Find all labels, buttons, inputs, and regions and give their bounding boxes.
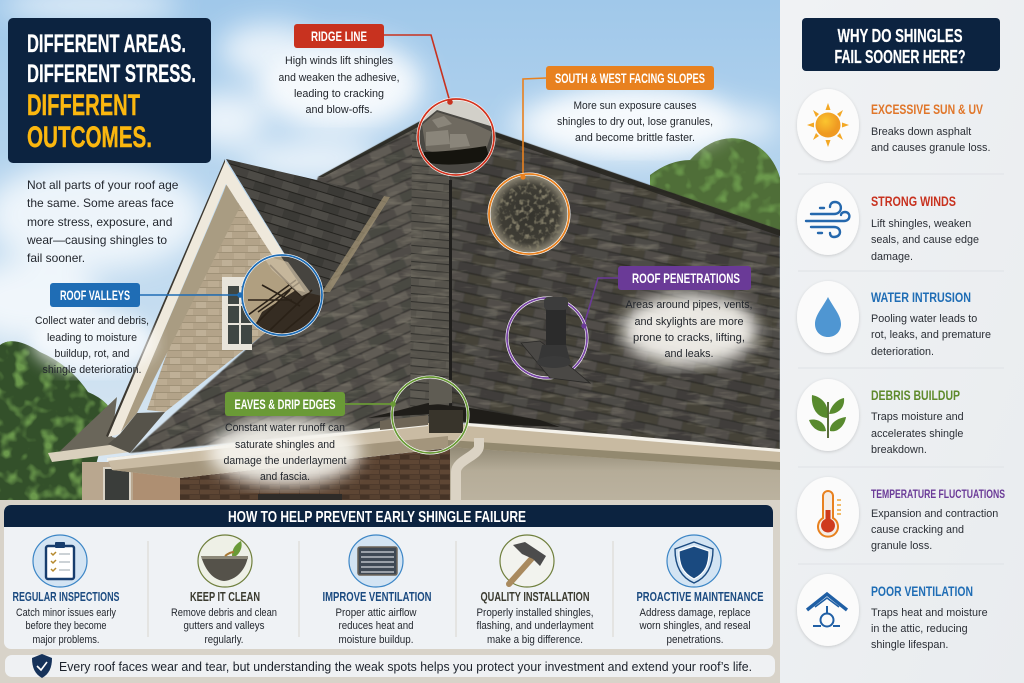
item: debris buildup: Traps moisture and [871,411,964,423]
intro text: fail sooner. [27,251,85,265]
callout: roof valleys: leading to moisture [47,332,137,344]
damaged eave corner [368,403,560,427]
item: water intrusion [797,281,991,358]
item: water intrusion: deterioration. [871,346,934,358]
callout: south and west facing slopes: More sun exposure causes [574,100,697,112]
title panel: DIFFERENT AREAS. [27,30,186,58]
callout: eaves and drip edges [209,377,468,486]
tip: keep it clean: KEEP IT CLEAN [190,589,260,604]
item: temperature fluctuations [797,477,1005,552]
lower valley wedge [108,412,165,453]
tip: proactive maintenance: worn shingles, and reseal [639,620,750,632]
left tree [0,341,114,505]
item: debris buildup: DEBRIS BUILDUP [871,388,960,403]
tip: keep it clean: Remove debris and clean [171,607,277,619]
tip: proactive maintenance: PROACTIVE MAINTENANCE [636,589,764,604]
tip: regular inspections: REGULAR INSPECTIONS [12,589,120,604]
tip: regular inspections: Catch minor issues early [16,607,117,619]
intro text: more stress, exposure, and [27,215,172,229]
icon: clipboard [33,535,87,587]
tip: improve ventilation: reduces heat and [338,620,414,632]
item: poor ventilation: Traps heat and moisture [871,607,988,619]
intro text: wear—causing shingles to [26,233,167,247]
item: water intrusion: Pooling water leads to [871,313,977,325]
tip: proactive maintenance: penetrations. [666,634,724,646]
item: debris buildup: accelerates shingle [871,428,963,440]
vent pipe [521,297,590,383]
weathering streaks [130,112,780,453]
hip band [410,112,449,430]
tip: quality installation: Properly installed shingles, [476,607,594,619]
callout: eaves and drip edges: and fascia. [260,471,310,483]
tip: quality installation: flashing, and underlayment [476,620,594,632]
item: debris buildup [797,379,964,456]
item: temperature fluctuations: Expansion and contraction [871,508,998,520]
callout: ridge line: High winds lift shingles [285,55,393,67]
title panel [8,18,211,163]
callout: ridge line: and blow-offs. [306,104,372,116]
item: poor ventilation: POOR VENTILATION [871,584,973,599]
brick wall [180,448,450,510]
item: strong winds [797,183,979,263]
item: water intrusion: rot, leaks, and premature [871,329,991,341]
callout: roof valleys: Collect water and debris, [35,315,149,327]
intro text: the same. Some areas face [27,196,174,210]
panel heading [802,18,1000,71]
tip: improve ventilation: IMPROVE VENTILATION [322,589,432,604]
item: poor ventilation: shingle lifespan. [871,639,948,651]
icon: vent grille [349,535,403,587]
tip: quality installation [476,535,594,646]
panel heading: FAIL SOONER HERE? [834,47,966,67]
tip: improve ventilation: moisture buildup. [338,634,414,646]
callout: eaves and drip edges: EAVES & DRIP EDGES [234,396,336,412]
dormer roof [226,159,390,290]
item: excessive sun: Breaks down asphalt [871,126,971,138]
icon: shield [667,535,721,587]
title panel: DIFFERENT [27,89,140,122]
icon: check shield [32,654,52,678]
icon: attic vent [807,594,847,626]
callout: south and west facing slopes: and become brittle faster. [575,132,695,144]
intro text: Not all parts of your roof age [27,178,179,192]
item: water intrusion: WATER INTRUSION [871,290,971,305]
right tree [650,138,780,235]
tip: proactive maintenance [636,535,764,646]
tip: quality installation: QUALITY INSTALLATION [480,589,590,604]
dormer window [222,277,252,350]
callout: roof valleys [31,255,322,376]
callout: south and west facing slopes: SOUTH & WEST FACING SLOPES [555,70,705,86]
prevention heading band [4,505,773,527]
panel: how to help prevent failure [4,505,773,649]
background photo: house and sky [0,0,780,683]
tip: improve ventilation [322,535,432,646]
lower left wing [60,397,133,452]
closing message bar [5,654,775,678]
tip: regular inspections: major problems. [32,634,100,646]
icon: leaves [809,395,846,438]
callout: roof penetrations [507,266,758,383]
tip: keep it clean: gutters and valleys [184,620,264,632]
item: excessive sun [797,89,990,161]
callout: eaves and drip edges: saturate shingles and [235,439,335,451]
icon: water drop [815,297,841,337]
item: poor ventilation: in the attic, reducing [871,623,968,635]
title panel: OUTCOMES. [27,121,152,154]
item: excessive sun: EXCESSIVE SUN & UV [871,102,983,117]
icon: sun [807,103,849,147]
callout: eaves and drip edges: Constant water runoff can [225,422,345,434]
tip: improve ventilation: Proper attic airflow [336,607,417,619]
downspout [456,438,479,510]
main roof left face [130,112,449,453]
item: strong winds: seals, and cause edge [871,234,979,246]
tip: quality installation: make a big difference. [487,634,583,646]
item: poor ventilation [797,574,988,651]
panel heading: WHY DO SHINGLES [838,26,962,46]
tip: regular inspections: before they become [26,620,107,632]
callout: south and west facing slopes: shingles to dry out, lose granules, [557,116,713,128]
tip: keep it clean [171,535,277,646]
intro text [26,178,179,265]
item: strong winds: STRONG WINDS [871,194,956,209]
panel: why do shingles fail [780,0,1024,683]
main roof right face [437,112,780,450]
callout: roof penetrations: ROOF PENETRATIONS [632,270,740,286]
callout: ridge line: RIDGE LINE [311,28,367,44]
callout: roof penetrations: Areas around pipes, vents, [626,299,752,311]
callout: eaves and drip edges: damage the underlayment [224,455,346,467]
gable soffit [120,184,240,433]
siding [448,445,780,510]
icon: thermometer [818,491,841,537]
item: debris buildup: breakdown. [871,444,927,456]
callout: ridge line [267,24,494,175]
item: strong winds: Lift shingles, weaken [871,218,971,230]
tip: keep it clean: regularly. [204,634,244,646]
gable trim [108,160,304,437]
callout: roof penetrations: prone to cracks, lifting, [633,332,745,344]
icon: hammer [500,535,554,587]
foreground ground strip [0,500,780,683]
callout: ridge line: and weaken the adhesive, [278,72,400,84]
right gutter [448,423,780,470]
title panel: DIFFERENT STRESS. [27,60,196,88]
callout: roof valleys: ROOF VALLEYS [60,287,130,303]
item: strong winds: damage. [871,251,913,263]
item: excessive sun: and causes granule loss. [871,142,990,154]
callout: roof valleys: shingle deterioration. [42,364,142,376]
prevention heading band: HOW TO HELP PREVENT EARLY SHINGLE FAILURE [228,509,526,526]
closing message bar: Every roof faces wear and tear, but understanding the weak spots helps you protect your investment and extend your roof’s life. [59,659,752,674]
left gutter [107,423,448,478]
item: temperature fluctuations: granule loss. [871,540,932,552]
gable wall [147,185,320,412]
callout: south and west facing slopes [489,66,730,254]
callout: ridge line: leading to cracking [294,88,384,100]
item: temperature fluctuations: cause cracking and [871,524,964,536]
callout: roof penetrations: and leaks. [664,348,714,360]
callout: roof penetrations: and skylights are more [634,316,744,328]
icon: wind [806,202,849,237]
callout: roof valleys: buildup, rot, and [54,348,130,360]
tip: regular inspections [12,535,120,646]
tip: proactive maintenance: Address damage, replace [640,607,751,619]
icon: gutter and leaf [198,535,252,587]
